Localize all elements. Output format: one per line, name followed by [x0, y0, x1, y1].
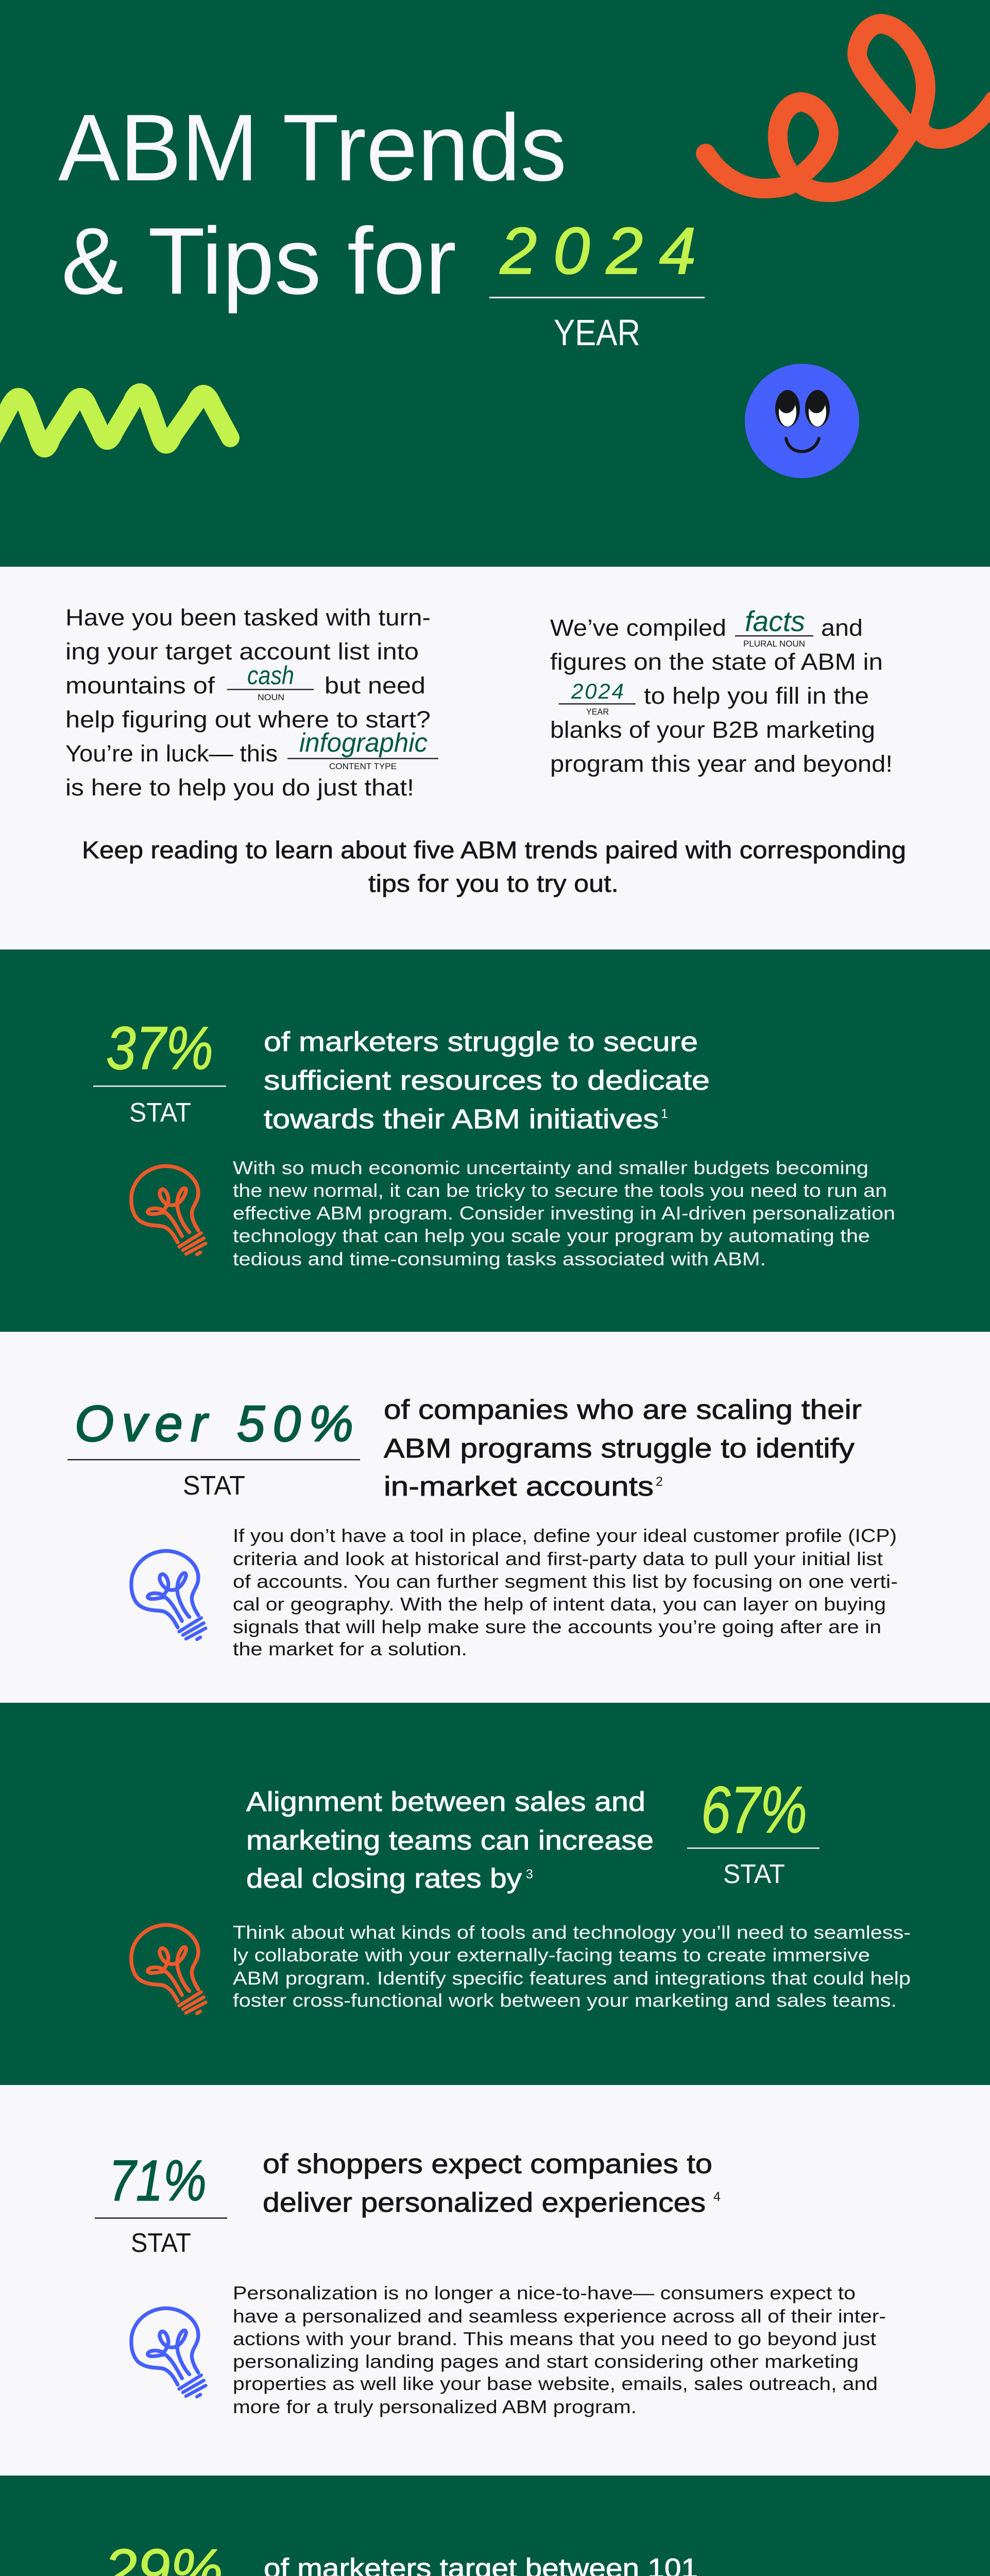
text block: intro right: 2024 [571, 679, 624, 703]
text block: intro right: We’ve compiled [550, 615, 726, 641]
text block: intro left: infographic [299, 728, 428, 758]
fill-in blank: 2024 year: YEAR [554, 313, 640, 353]
icon: orange squiggle [706, 24, 990, 192]
body text [233, 1525, 898, 1659]
heading: Alignment between sales and [246, 1787, 645, 1817]
body text [233, 1157, 895, 1269]
heading: marketing teams can increase [246, 1825, 654, 1856]
heading: of shoppers expect companies to [263, 2149, 712, 2179]
body text: more for a truly personalized ABM program. [233, 2396, 637, 2417]
text block: intro left [65, 604, 438, 801]
body text: signals that will help make sure the accounts you’re going after are in [233, 1616, 881, 1637]
text block: intro left: NOUN [258, 692, 284, 702]
body text: the market for a solution. [233, 1638, 467, 1659]
body text: technology that can help you scale your program by automating the [233, 1225, 870, 1246]
title: & Tips for [61, 208, 456, 314]
text block: intro right: to help you fill in the [644, 683, 869, 709]
text block: intro left: is here to help you do just that! [65, 774, 414, 801]
icon: orange light bulb [131, 1166, 206, 1255]
stat: over 50%: STAT [183, 1471, 245, 1501]
heading [264, 1027, 710, 1134]
text block: intro right: facts [745, 605, 805, 637]
heading: towards their ABM initiatives [264, 1104, 659, 1134]
heading [263, 2149, 721, 2218]
panel: trend 3 [0, 1703, 990, 2085]
heading [246, 1787, 654, 1894]
stat: 37%: STAT [129, 1098, 191, 1128]
stat: 67%: STAT [723, 1859, 785, 1889]
title [58, 94, 567, 314]
heading: deliver personalized experiences [263, 2188, 706, 2218]
body text: actions with your brand. This means that you need to go beyond just [233, 2328, 876, 2349]
body text: Think about what kinds of tools and technology you’ll need to seamless- [233, 1922, 911, 1943]
body text: cal or geography. With the help of intent data, you can layer on buying [233, 1594, 886, 1615]
body text: criteria and look at historical and first-party data to pull your initial list [233, 1548, 883, 1569]
body text: With so much economic uncertainty and smaller budgets becoming [233, 1157, 868, 1178]
text block: intro left: cash [247, 661, 294, 690]
body text: tedious and time-consuming tasks associated with ABM. [233, 1248, 766, 1269]
fill-in blank: 2024 year: 2024 [500, 214, 696, 288]
heading: deal closing rates by [246, 1863, 522, 1894]
text block: intro right: figures on the state of ABM in [550, 649, 883, 675]
stat: 67% [687, 1773, 820, 1889]
heading: 1 [661, 1107, 668, 1121]
icon: lime zigzag [0, 393, 230, 448]
body text: effective ABM program. Consider investing in AI-driven personalization [233, 1202, 895, 1224]
heading: in-market accounts [384, 1471, 654, 1502]
body text: ABM program. Identify specific features and integrations that could help [233, 1968, 911, 1989]
body text: If you don’t have a tool in place, define your ideal customer profile (ICP) [233, 1525, 897, 1546]
body text: personalizing landing pages and start considering other marketing [233, 2351, 859, 2372]
fill-in blank: 2024 year [489, 214, 705, 353]
icon: blue light bulb [131, 2308, 206, 2397]
body text: Personalization is no longer a nice-to-have— consumers expect to [233, 2282, 856, 2303]
text block: intro right: and [821, 615, 863, 641]
heading: 4 [713, 2190, 721, 2204]
heading [384, 1395, 862, 1502]
stat: 71%: STAT [131, 2228, 191, 2258]
heading: sufficient resources to dedicate [264, 1065, 710, 1096]
text block: keep reading: tips for you to try out. [368, 870, 619, 897]
panel: hero [0, 0, 990, 567]
body text: foster cross-functional work between your marketing and sales teams. [233, 1990, 897, 2011]
text block: intro right: program this year and beyond! [550, 751, 893, 777]
body text: of accounts. You can further segment this list by focusing on one verti- [233, 1571, 898, 1592]
text block: intro left: but need [325, 672, 425, 699]
stat: 37% [93, 1014, 226, 1128]
heading: 2 [656, 1475, 663, 1489]
heading: of marketers struggle to secure [264, 1027, 698, 1057]
heading: 3 [526, 1867, 533, 1882]
stat: 37%: 37% [106, 1014, 213, 1082]
text block: intro left: help figuring out where to start? [65, 706, 431, 733]
text block: keep reading: Keep reading to learn about five ABM trends paired with corresponding [82, 836, 906, 863]
panel: intro [0, 567, 990, 950]
text block: intro left: mountains of [65, 672, 215, 699]
heading: of companies who are scaling their [384, 1395, 862, 1425]
heading: ABM programs struggle to identify [384, 1433, 855, 1464]
text block: keep reading [82, 836, 906, 897]
body text: ly collaborate with your externally-facing teams to create immersive [233, 1944, 870, 1965]
icon: blue light bulb [131, 1551, 206, 1639]
body text: have a personalized and seamless experience across all of their inter- [233, 2306, 886, 2327]
body text [233, 1922, 911, 2011]
body text [233, 2282, 886, 2417]
text block: intro right [550, 605, 893, 777]
panel: trend 1 [0, 950, 990, 1332]
stat: over 50% [67, 1395, 360, 1501]
text block: intro right: YEAR [586, 707, 609, 717]
stat: 67%: 67% [701, 1773, 807, 1847]
icon: blue smiley face [745, 364, 859, 478]
panel: trend 2 [0, 1332, 990, 1703]
text block: intro right: PLURAL NOUN [743, 639, 805, 649]
stat: over 50%: Over 50% [75, 1395, 353, 1452]
panel: trend 5 [0, 2476, 990, 2576]
panel: trend 4 [0, 2085, 990, 2476]
stat: 71%: 71% [109, 2148, 207, 2213]
title: ABM Trends [58, 94, 567, 200]
text block: intro left: ing your target account list into [65, 638, 419, 665]
body text: the new normal, it can be tricky to secure the tools you need to run an [233, 1180, 887, 1201]
text block: intro left: You’re in luck— this [65, 740, 278, 767]
stat: 71% [95, 2148, 227, 2258]
icon: orange light bulb [131, 1925, 206, 2013]
text block: intro right: blanks of your B2B marketing [550, 717, 875, 743]
text block: intro left: Have you been tasked with turn- [65, 604, 431, 631]
text block: intro left: CONTENT TYPE [329, 761, 397, 771]
body text: properties as well like your base website, emails, sales outreach, and [233, 2373, 878, 2394]
